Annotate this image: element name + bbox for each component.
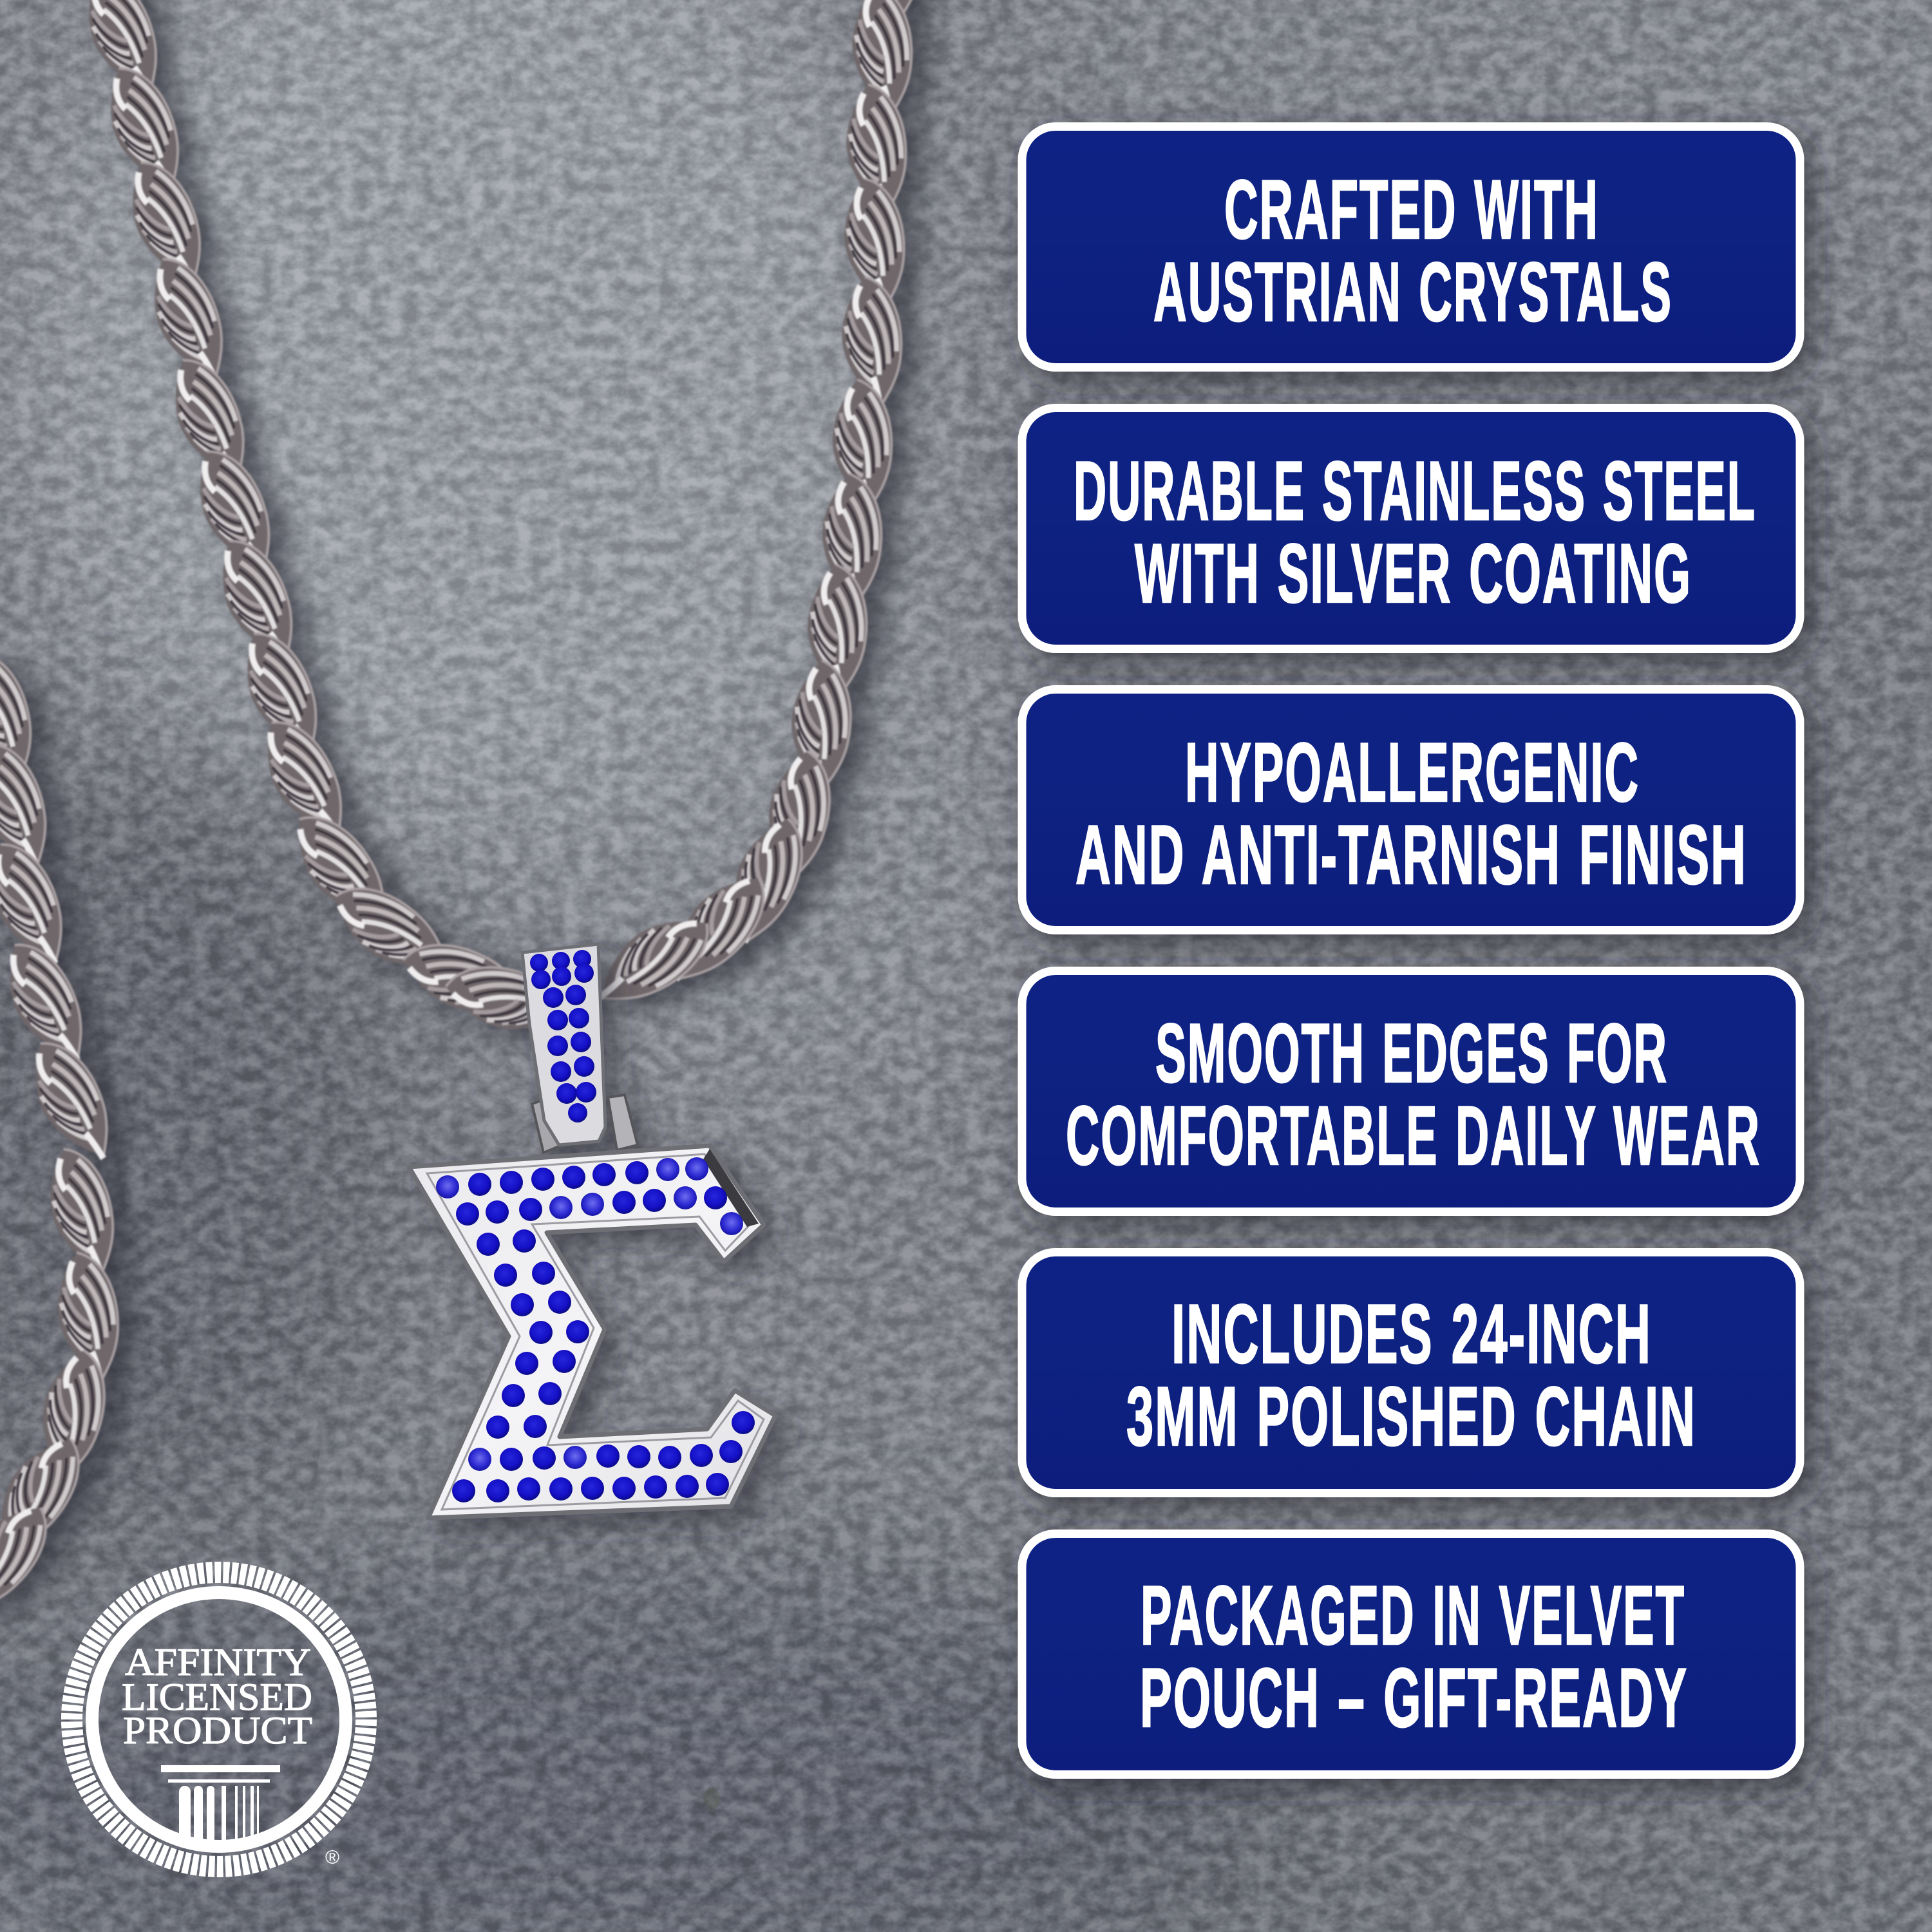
panel: velvet pouch <box>1022 1534 1800 1775</box>
badge text: LICENSED <box>122 1676 312 1718</box>
panel: smooth edges <box>1022 971 1800 1212</box>
panel: includes 24-inch chain <box>1022 1252 1800 1493</box>
panel: crafted with austrian crystals <box>1022 126 1800 367</box>
badge column icon <box>161 1765 280 1841</box>
badge: affinity licensed product seal: ® <box>325 1847 339 1868</box>
sigma body <box>409 1146 775 1518</box>
necklace chain: far left strand <box>0 649 122 1624</box>
sigma pendant <box>409 944 775 1518</box>
pendant clasp prongs <box>532 1095 638 1153</box>
sigma crystals <box>436 1157 755 1502</box>
badge text: PRODUCT <box>123 1709 312 1752</box>
necklace chain: left strand <box>64 0 581 1052</box>
badge text: AFFINITY <box>125 1641 311 1683</box>
panel: crafted with austrian crystals: CRAFTED WITH <box>1224 162 1599 256</box>
pendant bail <box>522 944 605 1145</box>
panel: hypoallergenic finish <box>1022 689 1800 930</box>
panel: durable stainless steel <box>1022 408 1800 649</box>
badge: affinity licensed product seal <box>72 1573 366 1868</box>
badge text <box>122 1641 312 1752</box>
necklace chain: right strand <box>582 0 928 1014</box>
